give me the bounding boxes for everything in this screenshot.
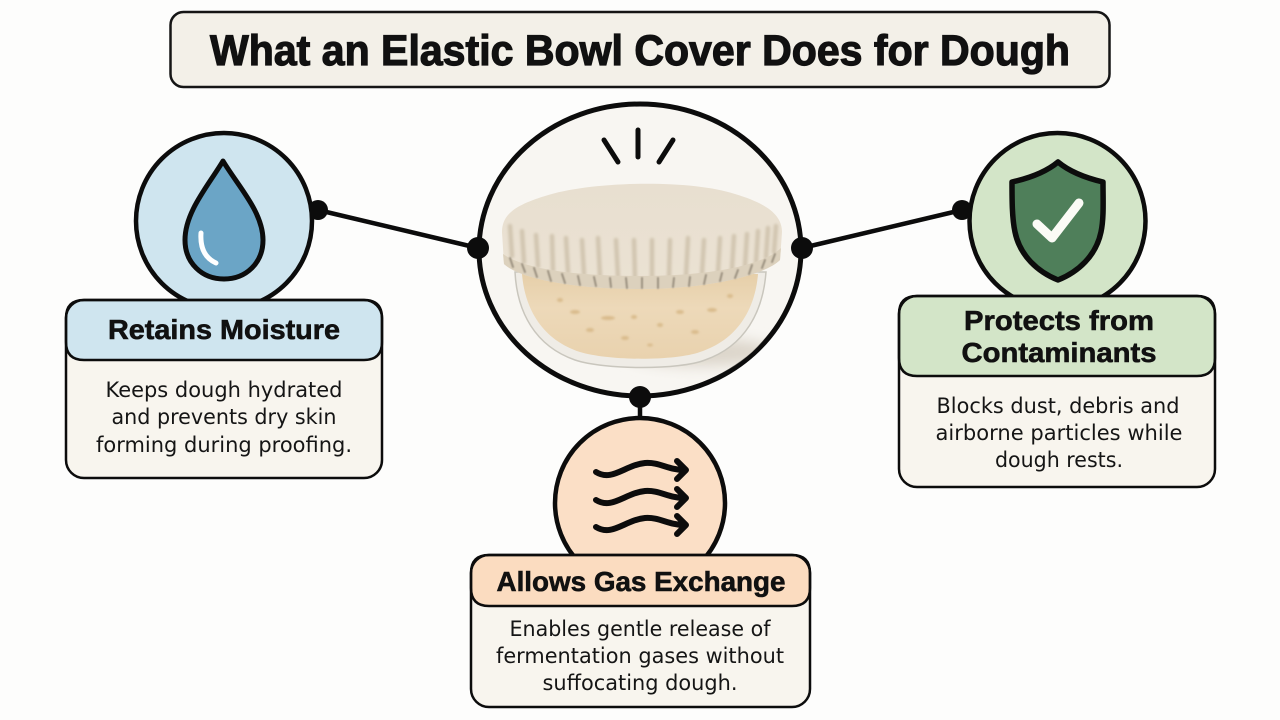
connector nodes on centre circle [467,237,813,408]
icon: airflow arrows [596,461,686,534]
connector: left benefit to centre [308,200,478,248]
heading: Protects from [964,305,1154,336]
card header [66,300,382,360]
card outline [899,296,1215,487]
panel: retains moisture [66,133,382,478]
bowl shadow [625,338,775,366]
cloth cover [502,184,782,289]
heading: Contaminants [962,337,1156,368]
icon: stretch rays [604,130,673,162]
icon: water drop [185,161,263,279]
description: forming during proofing. [96,433,352,458]
card body [471,555,810,707]
title [170,12,1110,87]
description [936,394,1182,473]
panel: protects from contaminants [899,133,1215,487]
heading: Retains Moisture [108,314,340,345]
description: dough rests. [995,448,1123,473]
heading [962,305,1156,368]
central circle: covered bowl of dough [479,104,801,396]
connector: bottom benefit to centre [638,397,642,420]
card body [899,296,1215,487]
glass bowl [515,272,766,368]
description: and prevents dry skin [112,405,336,430]
description: Keeps dough hydrated [106,378,342,403]
description: Enables gentle release of [510,617,771,642]
card body [66,300,382,478]
dough [522,274,758,359]
icon circle: peach [555,418,725,588]
description: suffocating dough. [542,671,738,696]
panel: allows gas exchange [471,418,810,707]
description: fermentation gases without [496,644,784,669]
card header [471,555,810,606]
heading: Allows Gas Exchange [496,566,786,597]
card outline [471,555,810,707]
description: airborne particles while [936,421,1182,446]
icon circle: blue [136,133,312,309]
connector: right benefit to centre [802,200,972,248]
description [496,617,784,696]
card outline [66,300,382,478]
description [96,378,352,458]
icon: shield with check [1012,162,1103,280]
description: Blocks dust, debris and [936,394,1180,419]
title: What an Elastic Bowl Cover Does for Dough [210,27,1070,75]
card header [899,296,1215,376]
icon circle: green [970,133,1146,309]
